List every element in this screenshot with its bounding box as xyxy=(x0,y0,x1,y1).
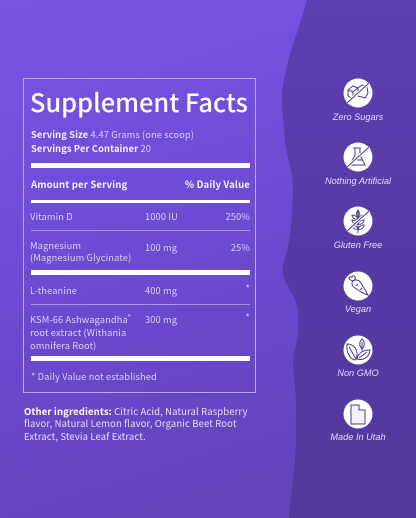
serving info: Serving Size 4.47 Grams (one scoop) xyxy=(31,127,194,141)
row: magnesium: (Magnesium Glycinate) xyxy=(30,250,131,264)
footnote: * Daily Value not established xyxy=(31,368,157,382)
row: L-theanine xyxy=(30,280,250,296)
panel: supplement facts xyxy=(23,78,256,393)
row: L-theanine: L-theanine xyxy=(30,282,77,296)
row: ashwagandha: root extract (Withania xyxy=(30,325,126,339)
row: L-theanine: 400 mg xyxy=(145,282,177,296)
serving info xyxy=(31,127,194,155)
row: ashwagandha: * xyxy=(246,310,250,324)
label: nothing artificial: Nothing Artificial xyxy=(325,176,391,186)
row: magnesium: 100 mg xyxy=(145,240,177,254)
label: made in Utah: Made In Utah xyxy=(330,432,386,442)
label: vegan: Vegan xyxy=(345,304,371,314)
title: Supplement Facts xyxy=(30,84,248,120)
icon: Utah xyxy=(344,400,372,428)
icon: wheat xyxy=(344,206,372,236)
serving info: Servings Per Container 20 xyxy=(31,141,151,155)
row: ashwagandha xyxy=(30,310,250,352)
table header: Amount per Serving xyxy=(31,177,127,191)
row: ashwagandha: 300 mg xyxy=(145,312,177,326)
label: zero sugars: Zero Sugars xyxy=(333,112,383,122)
label: non GMO: Non GMO xyxy=(337,368,379,378)
other ingredients: Extract, Stevia Leaf Extract. xyxy=(24,429,146,443)
icon: leaves xyxy=(344,336,372,364)
row: vitamin D: 1000 IU xyxy=(145,208,178,222)
row: vitamin D: 250% xyxy=(225,208,250,222)
other ingredients: Other ingredients: Citric Acid, Natural Raspberry xyxy=(24,404,248,418)
icon: carrot xyxy=(344,272,372,300)
row: magnesium xyxy=(30,238,250,264)
icon: zero sugars xyxy=(344,78,372,108)
row: vitamin D: Vitamin D xyxy=(30,208,73,222)
row: magnesium: Magnesium xyxy=(30,238,81,252)
other ingredients xyxy=(24,404,248,443)
row: L-theanine: * xyxy=(246,280,250,294)
row: ashwagandha: omnifera Root) xyxy=(30,338,96,352)
icon: flask xyxy=(344,142,372,172)
row: vitamin D xyxy=(30,208,250,222)
daily value header: % Daily Value xyxy=(185,177,250,191)
row: ashwagandha: KSM-66 Ashwagandha® xyxy=(30,312,131,326)
label: gluten free: Gluten Free xyxy=(334,240,382,250)
other ingredients: flavor, Natural Lemon flavor, Organic Beet Root xyxy=(24,416,237,430)
row: magnesium: 25% xyxy=(231,240,250,254)
